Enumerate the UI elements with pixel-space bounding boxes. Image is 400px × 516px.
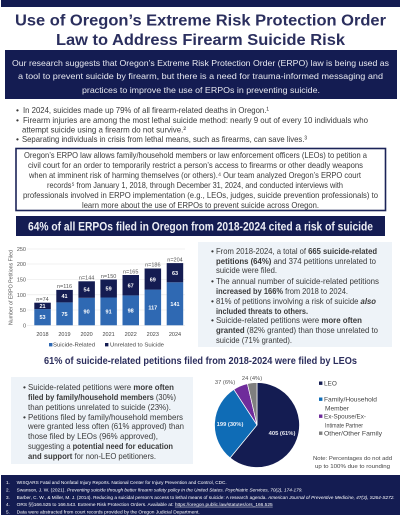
panel: petition findings: granted (82% granted) than those unrelated to — [216, 325, 378, 335]
chart legend — [49, 343, 164, 349]
bars 2019: n=116 — [57, 284, 72, 290]
bars 2021: 91 — [106, 310, 112, 316]
references panel: 2. — [6, 488, 10, 493]
bars 2020: 54 — [84, 288, 91, 294]
key facts bullets: • — [16, 105, 19, 115]
panel: petition findings: petitions (64%) and 374 petitions unrelated to — [216, 256, 376, 266]
key facts bullets — [16, 105, 368, 144]
panel: petition findings: • — [211, 276, 214, 286]
pie legend: Family/Household — [324, 396, 377, 404]
key facts bullets: Firearm injuries are among the most lethal suicide method: nearly 9 out of every 10 individuals who — [23, 115, 368, 125]
key facts bullets: • — [16, 134, 19, 144]
bars 2019: 41 — [61, 294, 68, 300]
panel: research summary: Our research suggests that Oregon’s Extreme Risk Protection Order (ERPO) law is being used as — [12, 58, 389, 68]
panel: family/household findings: • — [23, 412, 26, 422]
panel: family/household findings: suggesting a potential need for education — [28, 441, 173, 451]
top bar — [1, 0, 400, 7]
chart legend: Suicide-Related — [53, 343, 95, 349]
key facts bullets: attempt suicide using a firearm do not survive.² — [22, 124, 186, 134]
panel: research summary — [5, 50, 397, 99]
panel: petition findings — [198, 242, 392, 347]
references panel: Barber, C. W., & Miller, M. J. (2014). Reducing a suicidal person’s access to lethal means of suicide: A research agenda. American Journal of Preventive Medicine, 47(3), S264-S272. — [17, 495, 395, 500]
bars 2024: 2024 — [169, 332, 181, 338]
bar chart: ERPO petitions by year — [8, 247, 185, 349]
panel: family/household findings: than petitions unrelated to suicide (23%). — [28, 402, 171, 412]
pie legend — [319, 380, 383, 438]
panel: petition findings: The annual number of suicide-related petitions — [216, 276, 379, 286]
bars 2018 — [34, 297, 51, 338]
references panel: Swanson, J. W. (2021). Preventing suicide through better firearm safety policy in the United States. Psychiatric Services, 70(2), 174-179. — [17, 488, 303, 493]
y axis labels: 200 — [17, 262, 26, 268]
title — [15, 12, 386, 49]
pie legend: Other/Other Family — [324, 430, 383, 438]
bars 2020: 90 — [84, 310, 90, 316]
pie chart: petitioner type — [215, 376, 300, 467]
bars 2020 — [78, 276, 95, 338]
y axis labels: 100 — [17, 293, 26, 299]
panel: petition findings: 81% of petitions involving a risk of suicide also — [216, 296, 376, 306]
key facts bullets: • — [16, 115, 19, 125]
heading: 61% filed by LEOs: 61% of suicide-related petitions filed from 2018-2024 were filed by LEOs — [44, 355, 357, 367]
chart legend: Unrelated to Suicide — [110, 343, 164, 349]
pie legend: Member — [325, 406, 350, 412]
panel: petition findings: • — [211, 315, 214, 325]
bars 2020: n=144 — [79, 276, 94, 282]
panel: petition findings: • — [211, 296, 214, 306]
panel: research summary: a tool to prevent suicide by firearm, but there is a need for trauma-informed messaging and — [18, 71, 383, 81]
references panel: WISQARS Fatal and Nonfatal Injury Reports. National Center for Injury Prevention and Control, CDC. — [17, 480, 227, 485]
panel: petition findings: increased by 166% from 2018 to 2024. — [216, 286, 348, 296]
bars 2022: 98 — [128, 308, 134, 314]
bars 2024: n=204 — [167, 258, 183, 264]
bars 2019: 75 — [61, 312, 68, 318]
panel: ERPO law description: when at imminent risk of harming themselves (or others).⁴ Our team analyzed Oregon’s ERPO court — [28, 170, 362, 180]
panel: family/household findings: and support for non-LEO petitioners. — [28, 451, 156, 461]
panel: petition findings: • — [211, 246, 214, 256]
references panel — [1, 475, 400, 515]
bars 2023: 2023 — [147, 332, 159, 338]
title: Law to Address Firearm Suicide Risk — [56, 32, 345, 49]
panel: ERPO law description: records⁵ from January 1, 2018, through December 31, 2024, and conducted interviews with — [47, 180, 343, 190]
references panel: 1. — [6, 480, 10, 485]
banner heading: 64% — [16, 216, 385, 236]
bars 2022 — [122, 270, 139, 338]
panel: family/household findings: • — [23, 382, 26, 392]
panel: petition findings: suicide (71% granted). — [216, 335, 292, 345]
pie chart: petitioner type: 199 (30%) — [217, 422, 243, 428]
panel: petition findings: Suicide-related petitions were more often — [216, 315, 362, 325]
y axis title: Number of ERPO Petitions Filed — [8, 250, 14, 325]
bars 2018: 53 — [39, 315, 46, 321]
bars 2018: 21 — [39, 304, 46, 310]
bars 2023 — [145, 262, 161, 338]
panel: family/household findings: those filed by LEOs (96% approved), — [28, 431, 158, 441]
bars 2023: 117 — [148, 306, 157, 312]
pie legend: Intimate Partner — [325, 422, 364, 430]
bars 2021: 2021 — [102, 332, 115, 338]
references panel: Data were abstracted from court records provided by the Oregon Judicial Department. — [17, 509, 200, 514]
panel: ERPO law description — [16, 148, 386, 210]
bars 2022: 67 — [128, 284, 134, 290]
note on rounding — [313, 456, 392, 470]
bars 2021 — [100, 274, 117, 338]
bars 2019 — [56, 284, 73, 338]
bars 2023: 69 — [150, 278, 156, 284]
y axis labels: 250 — [17, 247, 26, 253]
bars 2020: 2020 — [80, 332, 93, 338]
bars 2018: 2018 — [36, 332, 49, 338]
panel: family/household findings: Petitions filed by family/household members — [28, 412, 183, 422]
y axis labels: 0 — [23, 323, 26, 329]
pie legend: Ex-Spouse/Ex- — [324, 414, 366, 420]
panel: research summary: practices to improve the use of ERPOs in preventing suicide. — [82, 85, 320, 95]
bars 2021: n=150 — [101, 274, 116, 280]
panel: family/household findings — [11, 377, 193, 464]
panel: petition findings: included threats to others. — [216, 306, 308, 316]
references panel: 5. — [6, 509, 10, 514]
references panel: ORS §§166.525 to 166.543. Extreme Risk Protection Orders. Available at: https://oregon.public.law/statutes/ors_166.525 — [17, 502, 273, 507]
panel: ERPO law description: civil court for an order to temporarily restrict a person’s access to firearms or other deadly weapons — [28, 160, 363, 170]
y axis labels: 150 — [17, 278, 26, 284]
bars 2022: 2022 — [125, 332, 137, 338]
pie chart: petitioner type: 405 (61%) — [269, 431, 295, 437]
title: Use of Oregon’s Extreme Risk Protection Order — [15, 12, 386, 30]
bars 2024: 63 — [172, 271, 178, 277]
bars 2022: n=165 — [123, 270, 138, 276]
key facts bullets: In 2024, suicides made up 79% of all firearm-related deaths in Oregon.¹ — [23, 105, 269, 115]
panel: family/household findings: were granted less often (61% approved) than — [27, 421, 184, 431]
panel: ERPO law description: professionals involved in ERPO implementation (e.g., LEOs, judges, suicide prevention professionals) to — [23, 190, 378, 200]
note on rounding: up to 100% due to rounding — [315, 464, 390, 470]
y axis labels: 50 — [20, 308, 26, 314]
panel: family/household findings: Suicide-related petitions were more often — [28, 382, 174, 392]
panel: petition findings: suicide were filed. — [216, 265, 277, 275]
pie chart: petitioner type: 24 (4%) — [242, 376, 262, 382]
pie chart: petitioner type: 37 (6%) — [215, 380, 235, 386]
references panel: 3. — [6, 495, 10, 500]
pie legend: LEO — [324, 380, 337, 388]
bars 2024 — [167, 258, 183, 338]
panel: ERPO law description: Oregon’s ERPO law allows family/household members or law enforcement officers (LEOs) to petition a — [24, 150, 367, 160]
bars 2021: 59 — [106, 286, 112, 292]
bars 2023: n=186 — [145, 262, 161, 268]
y axis labels — [17, 247, 26, 329]
bars 2018: n=74 — [36, 297, 49, 303]
note on rounding: Note: Percentages do not add — [313, 456, 392, 462]
key facts bullets: Separating individuals in crisis from lethal means, such as firearms, can save lives.³ — [22, 134, 307, 144]
references panel: 4. — [6, 502, 10, 507]
panel: ERPO law description: learn more about the use of ERPOs to prevent suicide across Oregon. — [82, 200, 319, 210]
bars 2024: 141 — [170, 302, 180, 308]
panel: family/household findings: filed by family/household members (30%) — [28, 392, 176, 402]
panel: petition findings: From 2018-2024, a total of 665 suicide-related — [216, 246, 377, 256]
bars 2019: 2019 — [58, 332, 71, 338]
